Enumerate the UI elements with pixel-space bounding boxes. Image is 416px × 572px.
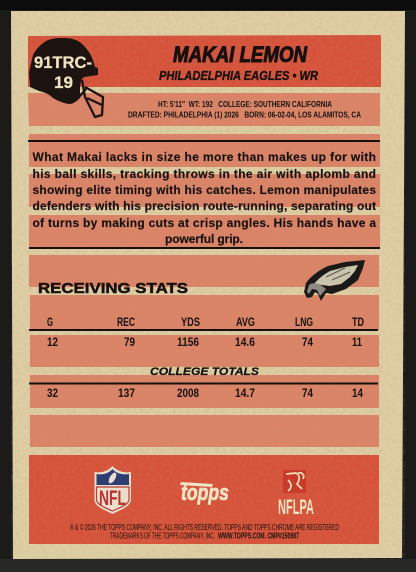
stats row: college: 74 — [302, 386, 313, 400]
biography text: his ball skills, tracking throws in the air with aplomb and — [32, 167, 376, 181]
team and position: PHILADELPHIA EAGLES • WR — [159, 69, 318, 83]
icon: Topps logo: topps — [181, 480, 229, 505]
stats row: college: 2008 — [177, 386, 199, 400]
legal text — [70, 523, 339, 540]
legal text: TRADEMARKS OF THE TOPPS COMPANY, INC. — [110, 532, 215, 540]
biography text — [32, 150, 376, 246]
icon: NFLPA logo — [278, 470, 314, 519]
stats row: season — [47, 335, 362, 349]
texture overlay — [28, 35, 381, 544]
panel: name banner — [28, 35, 381, 87]
stats header row: G — [47, 315, 53, 329]
stats row: college: 14 — [352, 386, 363, 400]
biography text: defenders with his precision route-running, separating out — [32, 199, 376, 213]
icon: NFL shield — [94, 466, 131, 514]
stats row: season: 12 — [47, 335, 58, 349]
stats row: season: 14.6 — [235, 335, 255, 349]
NFLPA wordmark: NFLPA — [278, 496, 314, 519]
stats header row: REC — [117, 315, 135, 329]
stats header row: LNG — [295, 315, 313, 329]
icon: helmet with card number — [29, 38, 103, 117]
legal text: WWW.TOPPS.COM. CMP#150987 — [218, 532, 299, 540]
panel: stats stripes — [29, 255, 379, 447]
stats header rule — [29, 329, 378, 331]
stats row: season: 79 — [124, 335, 135, 349]
biography text: What Makai lacks in size he more than makes up for with — [32, 150, 376, 164]
stats table — [29, 315, 378, 400]
stats row: season: 11 — [352, 335, 362, 349]
stats row: college: 32 — [47, 386, 58, 400]
title: player name: MAKAI LEMON — [173, 42, 308, 67]
stats row: season: 1156 — [177, 335, 199, 349]
panel: footer banner — [29, 455, 379, 544]
player info line 2: DRAFTED: PHILADELPHIA (1) 2026 BORN: 06-02-04, LOS ALAMITOS, CA — [128, 110, 361, 120]
stats header row: YDS — [181, 315, 200, 329]
heading: receiving stats: RECEIVING STATS — [38, 280, 188, 297]
icon: eagles logo — [304, 260, 365, 301]
biography text: powerful grip. — [165, 232, 243, 246]
icon: NFL shield: NFL — [99, 487, 126, 510]
heading: college totals: COLLEGE TOTALS — [150, 366, 260, 378]
biography rule top — [28, 140, 380, 142]
biography rule bottom — [29, 247, 380, 249]
card number line 1: 91TRC- — [34, 53, 92, 72]
player info line 1: HT: 5'11" WT: 192 COLLEGE: SOUTHERN CALIFORNIA — [158, 100, 332, 109]
college rule — [29, 382, 378, 384]
panel: player info band — [28, 93, 380, 126]
panel: biography stripes — [29, 134, 380, 248]
stats row: college — [47, 386, 363, 400]
card number line 2: 19 — [54, 73, 73, 92]
stats header row: AVG — [236, 315, 255, 329]
stats row: college: 14.7 — [235, 386, 255, 400]
stats row: season: 74 — [302, 335, 313, 349]
biography text: of turns by making cuts at crisp angles. His hands have a — [32, 216, 376, 230]
stats header row: TD — [352, 315, 364, 329]
stats row: college: 137 — [118, 386, 135, 400]
biography text: showing elite timing with his catches. Lemon manipulates — [32, 183, 376, 197]
stats header row — [47, 315, 364, 329]
